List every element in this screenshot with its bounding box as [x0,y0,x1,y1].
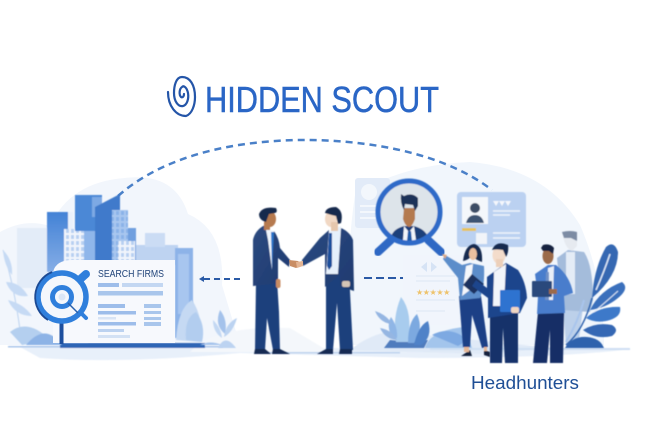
figure: woman with pointing arm [442,244,490,357]
profile card: right [457,192,526,247]
profile card: faded left [355,178,390,228]
left leaves decoration [3,250,62,345]
title logo: spiral icon [168,77,195,116]
plant: large right leaves [565,244,625,348]
icon: magnifier with candidate portrait [378,181,441,252]
figure: businessman right [302,207,354,354]
figure: grey colleague at back [557,231,593,344]
plants: centre foreground [375,297,472,348]
dashed arrow: towards search firms [199,276,242,282]
title: HIDDEN SCOUT [205,79,439,120]
plants beside search firms [176,300,237,348]
figure: businessman left [253,208,290,354]
dashed connector: right of handshake [364,277,405,279]
star rating: ★★★★★ [416,288,450,297]
city buildings [17,194,193,343]
background blob: left [0,177,240,345]
figure: man with blue folder [472,243,527,363]
figure: man with tablet [532,244,573,363]
label: search firms: SEARCH FIRMS [98,268,164,280]
icon: search target magnifier [35,272,86,344]
label: headhunters: Headhunters [471,373,579,393]
document content lines [98,283,163,338]
ground band [8,328,632,360]
panel: search firms document [53,260,175,343]
dashed arc connector [118,140,492,196]
handshake [289,260,303,268]
review card with stars [403,255,468,325]
background blob: right [348,162,604,345]
